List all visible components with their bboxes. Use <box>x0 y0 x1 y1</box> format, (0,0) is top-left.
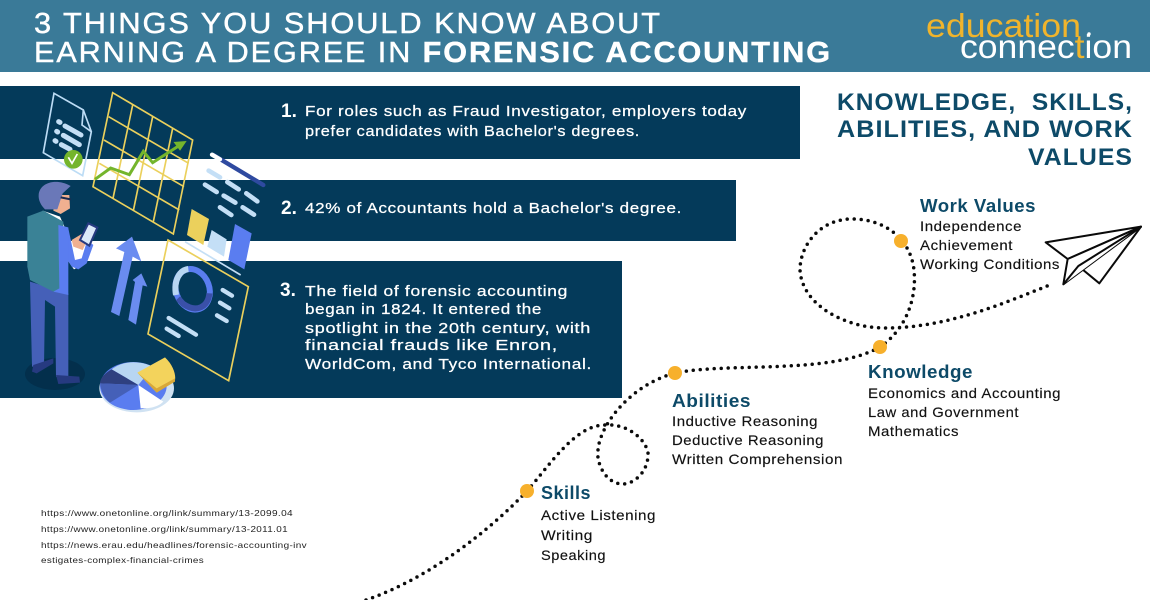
milestone: abilities <box>672 391 843 467</box>
panel: fact 2: 42% of Accountants hold a Bachelor's degree. <box>305 200 682 217</box>
title: EARNING A DEGREE IN FORENSIC ACCOUNTING <box>34 37 832 69</box>
milestone: knowledge: Economics and Accounting <box>868 385 1061 401</box>
milestone: work values: Working Conditions <box>920 256 1060 272</box>
milestone: abilities: Inductive Reasoning <box>672 413 818 429</box>
milestone: skills: Writing <box>541 527 593 543</box>
logo: education connection: connection <box>960 28 1132 65</box>
section heading: ABILITIES, AND WORK <box>837 116 1133 143</box>
panel: fact 1: prefer candidates with Bachelor's degrees. <box>305 123 640 140</box>
milestone: work values: Work Values <box>920 196 1036 216</box>
milestone: knowledge: Knowledge <box>868 362 973 382</box>
milestone: skills: Active Listening <box>541 507 656 523</box>
icon: document <box>43 93 91 176</box>
milestone markers <box>520 234 908 498</box>
icon: paper plane <box>1046 227 1141 284</box>
milestone: skills <box>541 483 656 563</box>
sources <box>41 508 308 565</box>
milestone: work values <box>920 196 1060 272</box>
title <box>34 8 832 69</box>
sources: https://www.onetonline.org/link/summary/13-2011.01 <box>41 524 288 534</box>
panel: fact 2 <box>0 180 736 241</box>
milestone: skills: Skills <box>541 483 591 503</box>
person <box>25 182 97 390</box>
milestone: knowledge: Law and Government <box>868 404 1019 420</box>
panel: fact 3: 3. <box>280 280 296 301</box>
section heading: KNOWLEDGE, SKILLS, <box>837 89 1133 116</box>
donut chart card <box>148 240 248 381</box>
icon: up arrows <box>111 237 147 325</box>
title: 3 THINGS YOU SHOULD KNOW ABOUT <box>34 8 662 40</box>
milestone: abilities: Abilities <box>672 391 751 411</box>
sources: https://news.erau.edu/headlines/forensic-accounting-inv <box>41 540 308 550</box>
illustration: accountant with floating charts <box>25 93 263 412</box>
panel: fact 3: WorldCom, and Tyco International. <box>305 356 592 373</box>
pie chart <box>99 357 175 412</box>
section heading <box>837 89 1133 171</box>
line chart grid <box>93 93 193 234</box>
panel: fact 3 <box>0 261 622 398</box>
milestone: knowledge <box>868 362 1061 439</box>
panel: fact 2: 2. <box>281 198 297 219</box>
panel: fact 1: 1. <box>281 101 297 122</box>
dotted flight path <box>366 219 1052 600</box>
panel: fact 1 <box>0 86 800 159</box>
bar chart <box>185 155 263 275</box>
milestone: knowledge: Mathematics <box>868 423 959 439</box>
sources: estigates-complex-financial-crimes <box>41 555 204 565</box>
sources: https://www.onetonline.org/link/summary/13-2099.04 <box>41 508 293 518</box>
milestone: work values: Achievement <box>920 237 1013 253</box>
header band <box>0 0 1150 72</box>
panel: fact 3: spotlight in the 20th century, with <box>305 320 591 337</box>
milestone: work values: Independence <box>920 218 1022 234</box>
milestone: abilities: Written Comprehension <box>672 451 843 467</box>
logo: education connection: education <box>926 7 1081 44</box>
section heading: VALUES <box>1028 144 1133 171</box>
milestone: skills: Speaking <box>541 547 606 563</box>
panel: fact 3: financial frauds like Enron, <box>305 337 558 354</box>
panel: fact 3: The field of forensic accounting <box>305 283 568 300</box>
milestone: abilities: Deductive Reasoning <box>672 432 824 448</box>
panel: fact 1: For roles such as Fraud Investigator, employers today <box>305 103 747 120</box>
panel: fact 3: began in 1824. It entered the <box>305 301 542 318</box>
logo: education connection <box>926 7 1132 65</box>
